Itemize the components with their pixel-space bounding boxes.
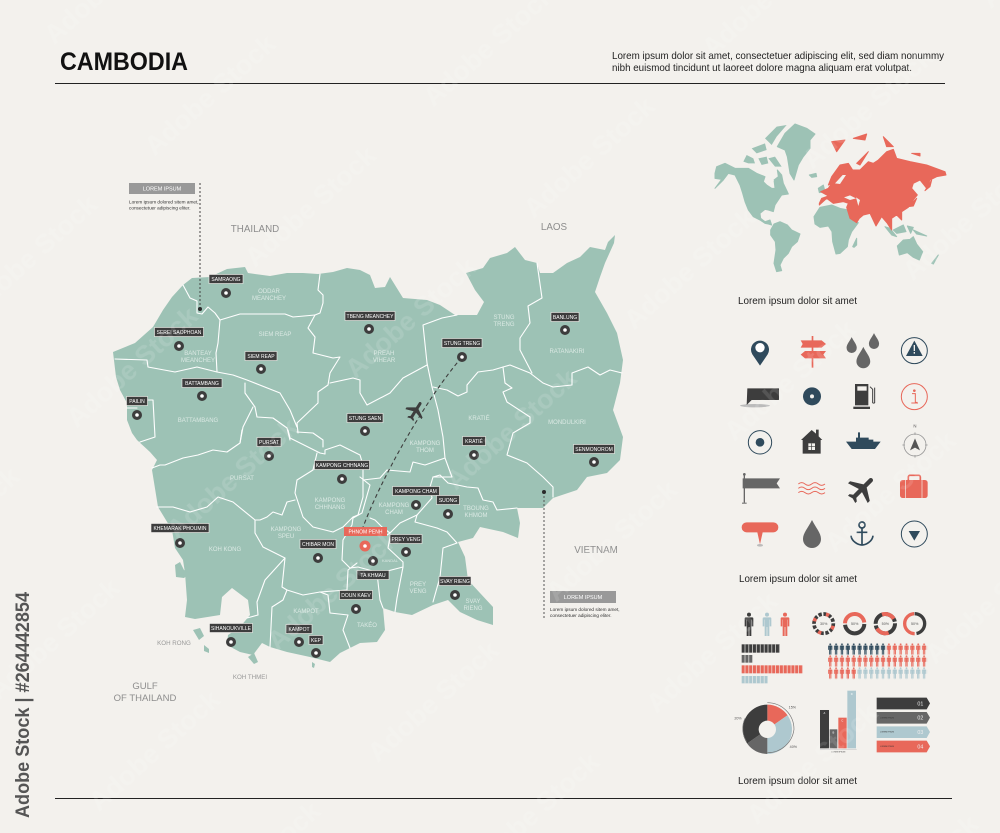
heading: icons caption: Lorem ipsum dolor sit amet [739,573,857,585]
pie chart [734,703,798,754]
city: Chibar Mon [300,540,336,563]
city: Svay Rieng: SVAY RIENG [440,579,470,585]
city: Sihanoukville: SIHANOUKVILLE [211,626,252,632]
neighbouring country names: KOH THMEI [233,674,267,681]
city: Samraong [209,274,243,298]
bar chart: A [823,711,825,715]
city: Chibar Mon: CHIBAR MON [302,542,334,548]
province names: RIENG [463,606,483,612]
province names: VIHEAR [373,358,396,364]
intro text: Lorem ipsum dolor sit amet, consectetuer adipiscing elit, sed diam nonummy [612,51,945,62]
icon: large drop [803,520,821,548]
heading: world map caption: Lorem ipsum dolor sit amet [738,295,857,307]
title: CAMBODIA [60,48,188,76]
city: Serei Saophoan [154,328,204,351]
province names: TBOUNG [463,506,489,512]
icon set [740,333,928,548]
city: Kratié: KRATIÉ [465,438,484,445]
icon: plane [842,469,882,509]
icon: suitcase [900,475,928,498]
province names: KAMPOT [293,609,319,615]
callout: bottom right [542,490,620,618]
province names: KANDAL [382,558,399,563]
city: Battambang: BATTAMBANG [185,381,219,387]
city: Kampong Chhnang [314,460,370,484]
icon: anchor [851,522,873,545]
donut 3: 50% [882,622,890,626]
icon: house [801,430,822,454]
arrow tags: LOREM IPSUM [880,732,894,734]
city: Stung Treng: STUNG TRENG [444,341,480,347]
city: Ta Khmau: TA KHMAU [360,573,386,579]
province names: KAMPONG [379,503,410,509]
striped bars [742,644,803,683]
pie chart: 40% [790,745,798,749]
city: Senmonorom: SENMONOROM [575,447,613,453]
bar chart [820,691,857,753]
city: Svay Rieng [439,576,471,600]
neighbouring country names: VIETNAM [574,545,618,556]
neighbouring country names [114,222,618,704]
city: Banlung [551,312,579,335]
province names: VENG [409,589,427,595]
city: Suong: SUONG [439,498,457,504]
intro text: nibh euismod tincidunt ut laoreet dolore magna aliquam erat volutpat. [612,63,912,74]
city: Suong [436,496,460,519]
donut 1 [812,612,836,636]
city: Prey Veng [390,534,422,557]
province names: KAMPONG [315,498,346,504]
country map: Cambodia [113,235,623,668]
icon: compass: N [913,423,917,428]
donut 4 [905,614,925,634]
province names: KHMOM [464,513,488,519]
callout: top left: LOREM IPSUM [143,186,182,192]
province names: THOM [416,448,434,454]
province names: PREAH [374,351,394,357]
province names: BANTEAY [184,351,212,357]
city: Serei Saophoan: SEREI SAOPHOAN [157,330,202,336]
neighbouring country names: THAILAND [231,224,279,235]
city: Prey Veng: PREY VENG [391,537,421,543]
inland seas [767,175,860,206]
city: Kampong Chhnang: KAMPONG CHHNANG [316,463,368,469]
icon: waves [798,483,825,494]
icon: flag [742,473,780,504]
city: Pailin [126,396,148,420]
city: Kep [309,636,323,658]
city: Doun Kaev [340,590,372,614]
people icons [745,613,789,636]
icon: speech flag [740,388,779,407]
bar chart: B [832,730,834,734]
city: Stung Saen [347,414,383,436]
capital: Phnom Penh: PHNOM PENH [349,530,383,536]
bar chart: C [841,719,843,723]
city: Khemarak Phoumin [151,524,209,548]
province names: STUNG [494,315,515,321]
city: Kratié [462,436,486,460]
Eurasia highlighted [819,134,946,230]
people grid [828,643,928,679]
donut 1: 30% [820,622,828,626]
Africa [814,205,858,254]
Australia and islands [885,225,938,264]
province names: MONDULKIRI [548,420,586,426]
arrow tags: LOREM IPSUM [880,746,894,748]
city: Senmonorom [574,444,614,467]
arrow tags: LOREM IPSUM [880,717,894,719]
arrow tags [877,698,930,752]
province names: KRATIÉ [468,415,490,422]
city: Siem Reap: SIEM REAP [247,354,275,360]
city: Kampot [286,624,312,647]
city: Doun Kaev: DOUN KAEV [341,593,371,599]
icon: red marker [742,522,778,547]
province names: MEANCHEY [252,296,286,302]
callout: top left [129,183,202,311]
icon: drops [847,333,879,368]
city: Tbeng Meanchey: TBENG MEANCHEY [347,314,394,320]
callout: bottom right: Lorem ipsum dolored sitem amet, [550,607,620,612]
icon: plane on flight path [402,397,429,424]
province names: RATANAKIRI [549,349,585,355]
province names: BATTAMBANG [178,418,219,424]
infographic charts [734,611,930,754]
province names: SPEU [278,534,294,540]
icon: signpost [801,336,826,368]
province names: PREY [410,582,426,588]
neighbouring country names: OF THAILAND [114,693,176,704]
city: Tbeng Meanchey [345,312,395,334]
islands [175,562,315,668]
province names: KAMPONG [410,441,441,447]
arrow tags: 03 [917,730,923,736]
city: Kampong Cham [392,486,440,510]
neighbouring country names: LAOS [541,222,568,233]
icon: target [748,431,772,454]
icon: disc [803,387,821,405]
pie chart: 15% [789,706,797,710]
pie chart: 20% [734,717,742,721]
South America [771,222,800,272]
province names: PURSAT [230,476,254,482]
city: Siem Reap [245,352,277,374]
city: Kampong Cham: KAMPONG CHAM [395,489,437,495]
province names: CHAM [385,510,403,516]
callout: top left: Lorem ipsum dolored sitem amet, [129,200,199,204]
province names: SIEM REAP [259,332,291,338]
flight path [362,357,462,530]
heading: charts caption: Lorem ipsum dolor sit amet [738,775,857,787]
icon: compass [902,423,928,458]
bar chart: D [851,692,853,696]
province names: SVAY [465,599,481,605]
Arctic islands [743,125,787,167]
arrow tags: 04 [917,744,923,750]
city: Ta Khmau [357,556,389,580]
bar chart: LOREM IPSUM [831,751,846,753]
city: Pailin: PAILIN [129,399,145,405]
donut 3 [873,611,898,636]
province names: KOH KONG [209,547,241,553]
Greenland and Iceland [777,124,825,193]
city: Kampot: KAMPOT [288,627,310,633]
intro text [612,51,945,74]
stock id vertical text: Adobe Stock | #264442854 [13,592,34,818]
city: Kep: KEP [311,638,322,644]
city: Samraong: SAMRAONG [211,277,241,283]
province names: TAKÉO [357,622,377,629]
province names: CHHNANG [315,505,345,511]
donut 4: 50% [911,622,919,626]
callout: top left: consectetuer adipiscing eliter. [129,206,190,210]
icon: fuel pump [853,384,875,409]
province names: ODDAR [258,289,280,295]
icon: info [901,384,927,410]
city: Stung Saen: STUNG SAEN [349,416,382,422]
callout: bottom right: consectetuer adipiscing eliter. [550,613,612,618]
donut 2 [845,614,865,634]
province names: TRENG [494,322,515,328]
icon: down arrow circle [901,521,927,547]
city: Stung Treng [442,338,482,362]
province names [178,289,586,629]
city: Pursat: PURSAT [259,440,279,446]
North America [715,163,788,225]
icon: ship [846,432,881,449]
neighbouring country names: KOH RONG [157,640,191,647]
icon: warning [901,338,927,364]
world map [715,124,946,272]
city: Battambang [182,378,222,401]
capital: Phnom Penh [344,527,387,552]
arrow tags: 01 [917,701,923,707]
icon: location pin [751,341,769,366]
city: Banlung: BANLUNG [553,315,577,321]
city: Sihanoukville [210,624,252,647]
province borders [115,263,622,648]
province names: MEANCHEY [181,358,215,364]
neighbouring country names: GULF [132,681,158,692]
donut 2: 50% [851,622,859,626]
callout: bottom right: LOREM IPSUM [564,595,603,601]
city: Khemarak Phoumin: KHEMARAK PHOUMIN [153,526,207,532]
province names: KAMPONG [271,527,302,533]
city: Pursat [257,438,281,461]
map outline [113,235,623,662]
arrow tags: 02 [917,716,923,722]
